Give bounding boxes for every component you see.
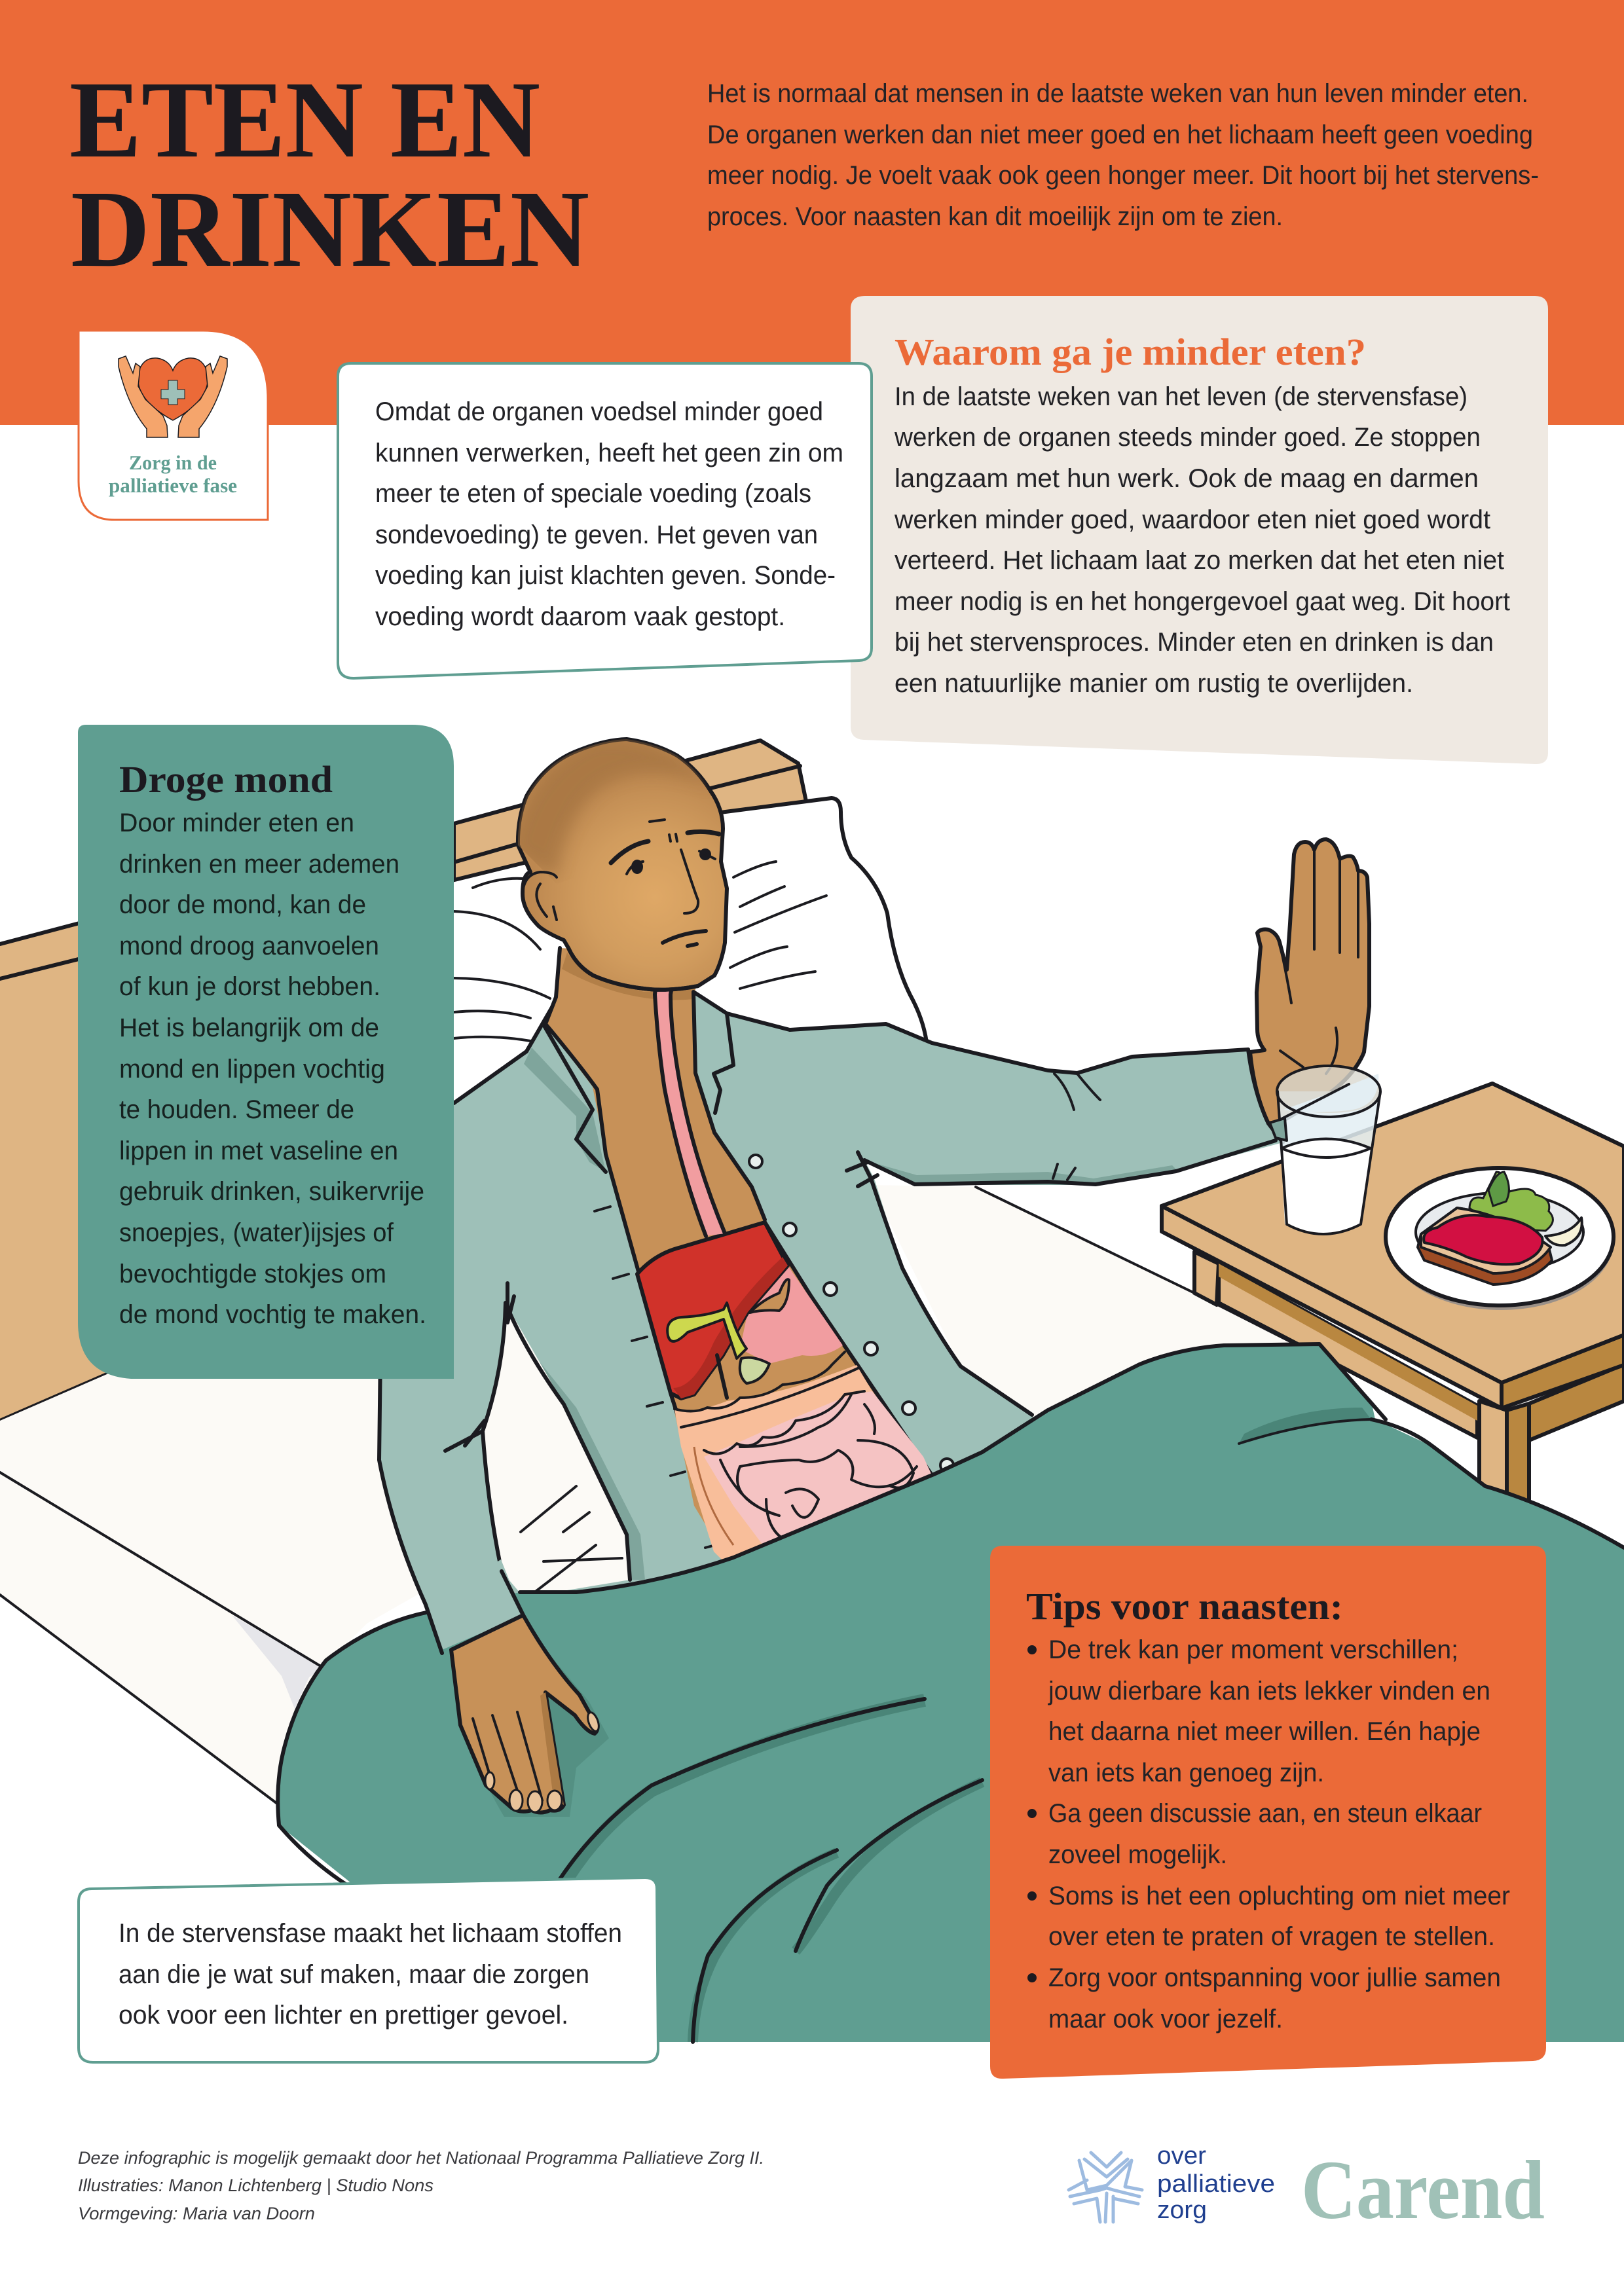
buttons	[749, 1155, 953, 1472]
panel text: de mond vochtig te maken.	[119, 1300, 426, 1329]
footer credits: Deze infographic is mogelijk gemaakt door het Nationaal Programma Palliatieve Zorg II.	[78, 2148, 764, 2168]
ear	[523, 872, 557, 926]
eyebrows	[611, 831, 719, 863]
wordmark: palliatieve	[1157, 2170, 1275, 2198]
callout text: In de stervensfase maakt het lichaam stoffen	[119, 1919, 622, 1948]
intestines	[674, 1365, 943, 1571]
forehead lines	[650, 820, 677, 841]
callout text: voeding kan juist klachten geven. Sonde-	[375, 561, 836, 590]
badge text	[109, 451, 237, 497]
tips text: jouw dierbare kan iets lekker vinden en	[1048, 1677, 1490, 1705]
bullets	[1027, 1645, 1037, 1982]
shirt	[379, 992, 1283, 1650]
icon: star	[1069, 2153, 1142, 2222]
blanket folds	[563, 1700, 925, 1886]
logo badge	[79, 331, 268, 520]
bile and gallbladder	[667, 1303, 747, 1358]
tips text: zoveel mogelijk.	[1048, 1840, 1227, 1869]
head	[511, 737, 727, 990]
panel: waarom minder eten	[851, 296, 1548, 764]
panel text: In de laatste weken van het leven (de stervensfase)	[895, 382, 1467, 411]
wordmark: zorg	[1157, 2196, 1207, 2224]
glass of milk	[1270, 1066, 1380, 1234]
callout text: sondevoeding) te geven. Het geven van	[375, 520, 818, 549]
tips text: het daarna niet meer willen. Eén hapje	[1048, 1717, 1481, 1746]
plate with toast and jam	[1386, 1168, 1614, 1310]
panel text: mond en lippen vochtig	[119, 1055, 385, 1084]
mouth	[663, 931, 706, 946]
panel text	[894, 382, 1510, 698]
wordmark	[1157, 2142, 1275, 2224]
callout text	[375, 397, 843, 631]
icon: heart in hands	[119, 356, 227, 437]
panel text: lippen in met vaseline en	[119, 1137, 398, 1165]
footer credits: Illustraties: Manon Lichtenberg | Studio Nons	[78, 2176, 434, 2195]
badge text: palliatieve fase	[109, 474, 237, 497]
logo: Carend: Carend	[1301, 2143, 1545, 2236]
panel text: meer nodig is en het hongergevoel gaat weg. Dit hoort	[895, 587, 1510, 616]
intro text: Het is normaal dat mensen in de laatste weken van hun leven minder eten.	[707, 79, 1528, 108]
logo: over palliatieve zorg	[1069, 2142, 1275, 2224]
stomach	[740, 1266, 843, 1364]
panel text: te houden. Smeer de	[119, 1095, 354, 1124]
intro text: De organen werken dan niet meer goed en het lichaam heeft geen voeding	[707, 120, 1533, 149]
panel text: Het is belangrijk om de	[119, 1013, 379, 1042]
intro text: meer nodig. Je voelt vaak ook geen honger meer. Dit hoort bij het stervens-	[707, 161, 1539, 190]
tips text	[1048, 1635, 1510, 2033]
callout text: ook voor een lichter en prettiger gevoel.	[119, 2001, 568, 2030]
illustration: patient in bed refusing food	[0, 737, 1624, 2042]
esophagus	[655, 954, 725, 1236]
panel text: bevochtigde stokjes om	[119, 1260, 386, 1288]
panel text: bij het stervensproces. Minder eten en drinken is dan	[895, 628, 1494, 657]
headboard	[454, 740, 806, 917]
panel text: langzaam met hun werk. Ook de maag en darmen	[895, 464, 1479, 493]
callout text: meer te eten of speciale voeding (zoals	[375, 479, 811, 508]
panel text: of kun je dorst hebben.	[119, 972, 380, 1001]
callout text	[119, 1919, 622, 2030]
tips text: maar ook voor jezelf.	[1048, 2005, 1283, 2033]
title: ETEN EN	[69, 59, 540, 181]
raised hand	[1250, 839, 1369, 1123]
panel: droge mond	[78, 725, 454, 1379]
intro text	[707, 79, 1539, 231]
panel text: werken minder goed, waardoor eten niet goed wordt	[894, 505, 1490, 534]
callout text: kunnen verwerken, heeft het geen zin om	[375, 439, 843, 467]
jaw line	[568, 948, 698, 990]
tips text: over eten te praten of vragen te stellen.	[1048, 1922, 1495, 1951]
panel text: Door minder eten en	[119, 809, 354, 837]
nose	[681, 850, 698, 913]
title	[69, 59, 589, 290]
callout: voeding	[338, 363, 872, 678]
callout text: Omdat de organen voedsel minder goed	[375, 397, 823, 426]
panel heading: Waarom ga je minder eten?	[895, 331, 1366, 373]
panel text	[119, 809, 426, 1329]
panel text: mond droog aanvoelen	[119, 932, 379, 960]
panel text: drinken en meer ademen	[119, 850, 399, 879]
eyes	[631, 860, 643, 874]
callout text: aan die je wat suf maken, maar die zorgen	[119, 1960, 589, 1989]
panel text: een natuurlijke manier om rustig te overlijden.	[895, 669, 1413, 698]
pillow gap under left arm	[483, 1303, 630, 1597]
panel: tips voor naasten	[990, 1546, 1546, 2079]
tips text: De trek kan per moment verschillen;	[1048, 1635, 1458, 1664]
intro text: proces. Voor naasten kan dit moeilijk zijn om te zien.	[707, 202, 1283, 231]
title: DRINKEN	[71, 168, 589, 290]
tips text: Zorg voor ontspanning voor jullie samen	[1048, 1963, 1501, 1992]
orange header band	[0, 0, 1624, 425]
wordmark: over	[1157, 2142, 1206, 2170]
panel text: werken de organen steeds minder goed. Ze stoppen	[894, 423, 1481, 452]
liver	[637, 1222, 788, 1398]
panel text: verteerd. Het lichaam laat zo merken dat het eten niet	[895, 546, 1504, 575]
badge text: Zorg in de	[129, 451, 217, 474]
tips text: Ga geen discussie aan, en steun elkaar	[1048, 1799, 1482, 1828]
bed frame left	[0, 851, 458, 1421]
callout: stervensfase	[79, 1878, 658, 2062]
panel text: gebruik drinken, suikervrije	[119, 1177, 424, 1206]
footer credits: Vormgeving: Maria van Doorn	[78, 2204, 315, 2223]
panel heading: Tips voor naasten:	[1026, 1585, 1343, 1628]
collar	[526, 992, 733, 1113]
organs	[637, 954, 969, 1571]
panel text: snoepjes, (water)ijsjes of	[119, 1218, 394, 1247]
buttonholes	[595, 1207, 720, 1548]
panel text: door de mond, kan de	[119, 890, 366, 919]
bedside table	[1162, 1084, 1624, 1503]
bed sheet and mattress	[0, 1185, 1320, 1805]
open chest: skin and neck	[545, 948, 765, 1274]
panel heading: Droge mond	[119, 758, 333, 801]
tips text: van iets kan genoeg zijn.	[1048, 1758, 1324, 1787]
blanket	[278, 1344, 1624, 2042]
pillow	[452, 798, 927, 1113]
resting hand	[426, 1559, 609, 1817]
callout text: voeding wordt daarom vaak gestopt.	[375, 602, 785, 631]
footer credits	[78, 2148, 764, 2223]
tips text: Soms is het een opluchting om niet meer	[1048, 1882, 1510, 1910]
